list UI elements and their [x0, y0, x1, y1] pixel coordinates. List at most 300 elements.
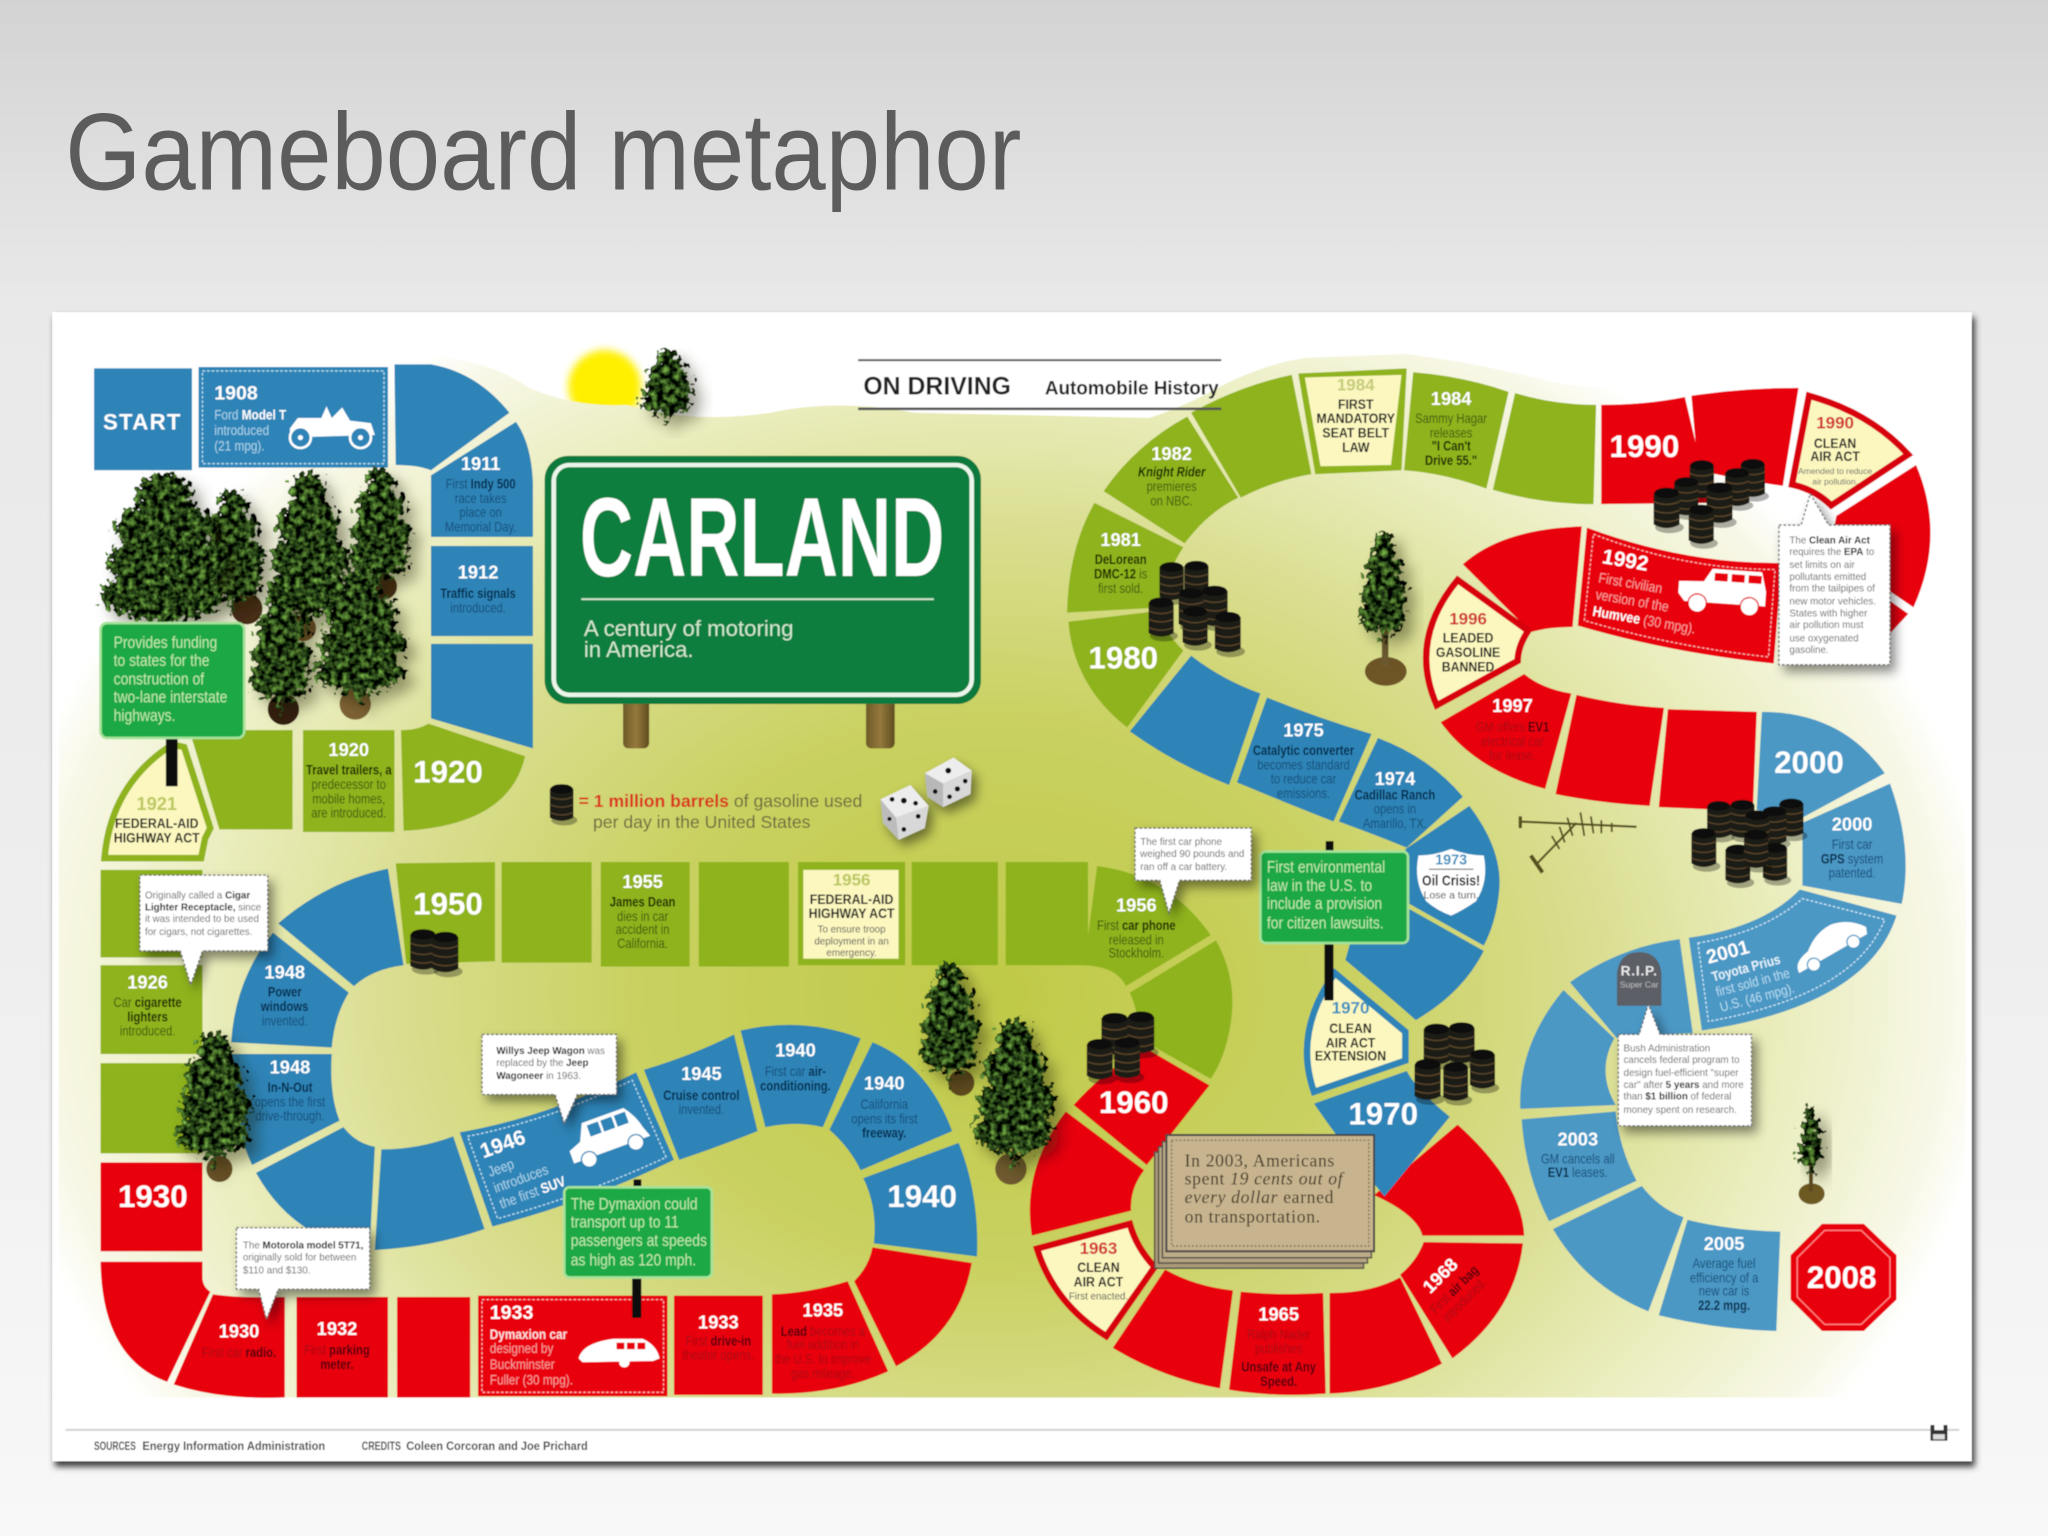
card: transportation fact: every dollar earned	[1185, 1187, 1334, 1207]
tile: 2005	[1659, 1220, 1780, 1331]
tile: 1968	[1400, 1242, 1523, 1358]
callout: Bush Administration: design fuel-efficient "super	[1624, 1068, 1739, 1079]
callout: Motorola: originally sold for between	[243, 1252, 356, 1263]
callout: cigar lighter: it was intended to be used	[145, 914, 259, 925]
tile: 1945: 1945	[681, 1063, 722, 1084]
tile: red blank top	[1691, 388, 1799, 486]
tile: 1948 In-N-Out	[230, 1054, 340, 1165]
callout: car phone: weighed 90 pounds and	[1139, 849, 1244, 860]
tile: 1955: James Dean	[610, 894, 675, 910]
tile: 2005: efficiency of a	[1690, 1271, 1758, 1286]
tile: 1935: gas mileage.	[791, 1366, 855, 1381]
tile: 1973 oil crisis: 1973	[1435, 853, 1467, 869]
icon: Prius	[1786, 910, 1873, 979]
tile: 1984 Sammy Hagar: "I Can't	[1432, 439, 1472, 454]
tile: 1960 large	[1074, 1049, 1209, 1165]
tile: 1940 air conditioning	[741, 1025, 861, 1127]
tile: 1956 Federal-Aid Highway Act: deployment in an	[814, 936, 889, 947]
tile: 1930 radio	[174, 1294, 285, 1398]
callout: Clean Air Act: set limits on air	[1789, 560, 1855, 571]
tile: 1990 Clean Air Act: Amended to reduce	[1798, 466, 1872, 476]
tile: 2001 Prius: Toyota Prius	[1710, 951, 1782, 985]
tile: 1921 Federal-Aid Highway Act	[104, 744, 210, 858]
tile: 2003: EV1 leases.	[1548, 1165, 1608, 1180]
tile: red big bend	[1463, 526, 1582, 632]
tile: 1992 Humvee	[1578, 528, 1782, 664]
tile: 1912: Traffic signals	[440, 586, 516, 601]
tile: 1940 California freeway: freeway.	[862, 1126, 906, 1141]
barrels: 2000	[1691, 799, 1808, 888]
green sign: federal funding: construction of	[114, 670, 205, 689]
barrels: 1960	[1087, 1012, 1159, 1084]
tile: 2005: Average fuel	[1693, 1256, 1756, 1272]
tile: red blank lower 1	[1556, 695, 1664, 806]
footer credits: Energy Information Administration	[142, 1440, 325, 1453]
tile: 1940 large	[863, 1143, 977, 1256]
tile: 2000 GPS: First car	[1832, 837, 1872, 852]
tile: 1932: 1932	[317, 1318, 357, 1339]
tile: 1946 Jeep SUV	[460, 1072, 674, 1226]
tile: blue top arc	[278, 869, 404, 986]
tile: 1975: becomes standard	[1257, 757, 1350, 773]
green sign: Dymaxion: The Dymaxion could	[571, 1195, 698, 1214]
tile: 1920 large: 1920	[413, 754, 483, 789]
callout: Clean Air Act	[1779, 494, 1890, 665]
icon: tombstone	[1617, 952, 1661, 1006]
tile: 1956 Federal-Aid Highway Act: emergency.	[826, 948, 877, 959]
tile: 1963 Clean Air Act	[1037, 1224, 1155, 1336]
tile: 1981	[1067, 503, 1183, 613]
tile: 1948 In-N-Out: In-N-Out	[268, 1080, 313, 1095]
tile: 1935: Lead becomes a	[781, 1324, 865, 1339]
barrels: 1950	[410, 929, 463, 977]
tile: 1965: Unsafe at Any	[1241, 1359, 1316, 1375]
tile: 1933 drive-in: First drive-in	[686, 1333, 751, 1349]
tile: start: START	[103, 410, 182, 435]
tile: 1992 Humvee: Humvee (30 mpg).	[1591, 603, 1697, 637]
tile: 1974	[1339, 738, 1463, 848]
tile: 1963 Clean Air Act: CLEAN	[1077, 1260, 1120, 1275]
tile: 1940 California freeway: California	[861, 1097, 908, 1112]
footer rule	[65, 1429, 1959, 1431]
card: transportation fact: In 2003, Americans	[1185, 1150, 1335, 1170]
tile: red right arc 2	[1829, 465, 1930, 607]
tile: 1984 seat belt law: LAW	[1342, 439, 1370, 455]
sign post right	[866, 699, 895, 748]
board landscape	[59, 354, 1966, 1398]
tile: blue blank lower	[1553, 1186, 1684, 1311]
tile: 1920 trailers	[303, 730, 394, 832]
tile: 1946 Jeep SUV: 1946	[477, 1126, 529, 1163]
tile: 1980 large: 1980	[1088, 641, 1158, 676]
tile: 1956 car phone: First car phone	[1097, 918, 1176, 933]
tile: 1975: 1975	[1283, 720, 1324, 741]
callout: cigar lighter	[140, 875, 268, 985]
barrels: 1970	[1415, 1022, 1499, 1106]
tile: 1920 trailers: 1920	[328, 739, 369, 760]
tile: 2000 GPS: GPS system	[1821, 851, 1883, 867]
icon: Dymaxion car	[579, 1339, 660, 1368]
callout: Bush Administration: money spent on research.	[1624, 1105, 1737, 1116]
card: transportation fact	[1155, 1135, 1374, 1268]
tile: 1940 air conditioning: conditioning.	[760, 1079, 831, 1094]
tile: 1912: 1912	[458, 562, 498, 583]
tile: 1955: dies in car	[617, 909, 668, 924]
tile: red corner 2	[854, 1247, 972, 1366]
callout: Clean Air Act: requires the EPA to	[1789, 547, 1875, 558]
tile: 2003: GM cancels all	[1541, 1152, 1615, 1167]
green sign: federal funding: Provides funding	[114, 634, 217, 652]
pine tree	[1359, 533, 1407, 686]
footer credits	[94, 1440, 588, 1453]
tile: 1973 oil crisis: Oil Crisis!	[1422, 872, 1480, 889]
tile: 1990 Clean Air Act: CLEAN	[1814, 435, 1856, 451]
tile: red bottom 1	[1113, 1270, 1233, 1388]
slide title: Gameboard metaphor	[65, 91, 1021, 213]
legend: barrels	[550, 784, 862, 832]
tile: 1984 seat belt law: SEAT BELT	[1322, 425, 1389, 441]
green sign: environmental law	[1260, 841, 1408, 1000]
tile: 2000 GPS: 2000	[1832, 814, 1872, 835]
green sign: federal funding	[101, 623, 244, 786]
tree near 1930	[176, 1032, 252, 1182]
icon: dice	[880, 758, 972, 840]
tile: 1956 car phone: 1956	[1116, 895, 1157, 916]
tile: 2008 stop sign	[1791, 1224, 1896, 1331]
tile: 1997	[1441, 674, 1571, 789]
icon: save	[1930, 1425, 1947, 1441]
tile: 1981: 1981	[1100, 529, 1141, 550]
tile: 1997: electrical car	[1481, 734, 1544, 749]
green sign: Dymaxion: passengers at speeds	[571, 1232, 707, 1250]
green sign: federal funding: highways.	[114, 707, 176, 725]
tile: green blank row 3	[912, 862, 998, 965]
tile: 1956 Federal-Aid Highway Act: FEDERAL-AID	[810, 891, 893, 907]
tile: 1932: meter.	[320, 1357, 354, 1372]
tile: 1970 Clean Air Act Extension: CLEAN	[1329, 1021, 1372, 1036]
tile: 1956 car phone	[1084, 866, 1211, 986]
tile: 1992 Humvee: 1992	[1600, 545, 1650, 576]
tile: 1933 Dymaxion: Dymaxion car	[490, 1326, 567, 1342]
green sign: Dymaxion: as high as 120 mph.	[571, 1251, 696, 1270]
tile: 1996 leaded gasoline banned: BANNED	[1442, 659, 1494, 675]
callout: Clean Air Act: new motor vehicles.	[1789, 596, 1876, 608]
sign post left	[623, 699, 649, 748]
tile: 1970 Clean Air Act Extension	[1307, 973, 1405, 1092]
tile: 1968: First air bag	[1427, 1263, 1482, 1317]
tile: 1935	[772, 1281, 888, 1394]
tile: 1933 Dymaxion: 1933	[490, 1302, 533, 1324]
tile: blue blank 1	[375, 1136, 485, 1250]
tile: 1945: Cruise control	[663, 1088, 739, 1103]
tile: 1940 California freeway	[829, 1042, 952, 1170]
tile: red small	[1890, 601, 1908, 633]
tile: 1911: Memorial Day.	[445, 520, 516, 535]
tile: 1956 Federal-Aid Highway Act: 1956	[833, 871, 870, 890]
tile: 1963 Clean Air Act: AIR ACT	[1074, 1274, 1123, 1290]
tile: 2003: 2003	[1557, 1128, 1598, 1149]
tile: 1968: 1968	[1418, 1254, 1462, 1297]
callout: Clean Air Act: air pollution must	[1789, 620, 1864, 631]
tile: 1948 In-N-Out: 1948	[270, 1057, 310, 1078]
tile: 1932: First parking	[304, 1342, 370, 1358]
icon: highway shield	[1417, 849, 1485, 916]
tile: 1940 California freeway: opens its first	[851, 1111, 918, 1127]
green sign: Dymaxion: transport up to 11	[571, 1214, 679, 1232]
tile: 1930 large	[101, 1162, 202, 1251]
tile: 1946 Jeep SUV: introduces	[491, 1161, 551, 1196]
tile: 1975: Catalytic converter	[1253, 743, 1354, 758]
tile: 1908: introduced	[214, 422, 269, 438]
tile: 1932	[296, 1297, 388, 1398]
tile: 1975: emissions.	[1277, 786, 1330, 801]
tile: 1956 car phone: released in	[1109, 932, 1164, 948]
tile: 1920 trailers: are introduced.	[311, 806, 386, 821]
legend: barrels: per day in the United States	[593, 812, 811, 832]
tile: 2000 large	[1757, 712, 1885, 819]
icon: Humvee	[1677, 567, 1767, 617]
icon: Model T car	[290, 406, 375, 448]
tile: 1990 large: 1990	[1610, 429, 1679, 464]
tile: 1992 Humvee: version of the	[1594, 586, 1670, 615]
tile: 1908	[199, 367, 388, 468]
callout: Clean Air Act: from the tailpipes of	[1789, 583, 1875, 595]
tile: 1996 leaded gasoline banned: GASOLINE	[1436, 644, 1501, 660]
tile: 2000 GPS: patented.	[1829, 866, 1876, 881]
tile: red corner	[101, 1262, 210, 1382]
tile: red bottom 2	[1330, 1277, 1442, 1394]
tile: 1948 In-N-Out: opens the first	[255, 1094, 326, 1110]
tile: 1965	[1229, 1292, 1326, 1395]
tile: 1956 Federal-Aid Highway Act: HIGHWAY ACT	[809, 906, 895, 921]
green sign: environmental law: law in the U.S. to	[1267, 877, 1372, 895]
tile: 1984 Sammy Hagar	[1404, 372, 1509, 488]
sun	[568, 350, 641, 423]
heading: ON DRIVING: ON DRIVING	[863, 373, 1012, 400]
tile: 1984 Sammy Hagar: 1984	[1431, 388, 1472, 409]
tile: 1926: Car cigarette	[114, 995, 182, 1010]
tile: 1948 In-N-Out: drive-through.	[255, 1109, 325, 1124]
tile: 1956 Federal-Aid Highway Act: To ensure troop	[818, 925, 886, 936]
tile: 1975: to reduce car	[1271, 772, 1336, 787]
tile: 1948 power windows: Power	[268, 985, 302, 1000]
tile: 1965: publishes	[1255, 1341, 1302, 1356]
tile: 1921 Federal-Aid Highway Act: 1921	[136, 793, 177, 814]
green sign: federal funding: two-lane interstate	[114, 688, 227, 707]
tile: 1920 large	[401, 724, 525, 831]
tile: 1926	[101, 965, 202, 1054]
tile: 1990 Clean Air Act	[1792, 396, 1908, 505]
tile: 1982: on NBC.	[1150, 493, 1193, 509]
tile: 1911: race takes	[455, 491, 507, 506]
tile: 1981: DeLorean	[1095, 552, 1147, 568]
tile: 1940 California freeway: 1940	[864, 1072, 905, 1093]
tile: blue blank diagonal	[1130, 656, 1260, 785]
tile: 1982: 1982	[1151, 443, 1192, 464]
tile: 1935: 1935	[803, 1300, 843, 1321]
tile: 1970 large: 1970	[1348, 1097, 1418, 1132]
tile: 1920 trailers: Travel trailers, a	[306, 763, 393, 778]
callout: Bush Administration: car" after 5 years and more	[1624, 1080, 1744, 1091]
barrels: 1980	[1149, 561, 1245, 657]
callout: Clean Air Act: gasoline.	[1789, 645, 1829, 656]
tile: 1930 radio: First car radio.	[202, 1345, 276, 1360]
tile: 1981: DMC-12 is	[1094, 567, 1147, 582]
tile: 1955: accident in	[616, 922, 669, 937]
callout: Bush Administration: Bush Administration	[1624, 1043, 1710, 1055]
tile: 1920 trailers: predecessor to	[312, 777, 386, 792]
tile: 1984 seat belt law: FIRST	[1338, 396, 1374, 412]
card: transportation fact: on transportation.	[1185, 1207, 1321, 1227]
tile: 1933 Dymaxion: Buckminster	[490, 1356, 555, 1372]
tile: 1940 large: 1940	[887, 1179, 957, 1214]
callout: Clean Air Act: The Clean Air Act	[1789, 535, 1870, 546]
tile: 1933 drive-in	[674, 1296, 763, 1395]
tree by the sun	[641, 350, 694, 421]
callout: Motorola: The Motorola model 5T71,	[243, 1240, 364, 1252]
tile: blue blank	[431, 644, 533, 748]
forest: left trees	[101, 468, 411, 725]
CARLAND road sign: in America.	[584, 637, 694, 662]
tile: 1935: fuel addition in	[787, 1337, 859, 1353]
tile: 1982: Knight Rider	[1138, 465, 1206, 480]
tile: green blank left	[101, 870, 202, 957]
icon: SUV	[562, 1103, 653, 1172]
tile: 1970 Clean Air Act Extension: 1970	[1332, 999, 1369, 1018]
tile: 1984 seat belt law: MANDATORY	[1317, 411, 1395, 426]
tile: 1992 Humvee: First civilian	[1597, 570, 1664, 597]
tile: 1908: (21 mpg).	[214, 438, 265, 454]
tile: red right arc	[1374, 1125, 1524, 1236]
trees centre	[919, 963, 1055, 1185]
tile: 2001 Prius: 2001	[1704, 936, 1752, 969]
tile: blue above 1970	[1345, 909, 1484, 1020]
tile: 1997: for lease.	[1489, 748, 1536, 763]
tile: 1984 Sammy Hagar: releases	[1430, 426, 1472, 441]
tile: 1965: Speed.	[1260, 1374, 1297, 1389]
tile: 1911: place on	[459, 505, 502, 521]
tile: 1996 leaded gasoline banned: LEADED	[1443, 630, 1493, 646]
tile: 1973 oil crisis: Lose a turn.	[1424, 891, 1479, 902]
tile: 1970 large	[1314, 1071, 1450, 1196]
tile: 1948 power windows: windows	[260, 999, 308, 1014]
tile: 1908: Ford Model T	[214, 406, 286, 422]
green sign: environmental law: First environmental	[1267, 858, 1385, 877]
tile: red left arc	[1030, 1112, 1144, 1236]
tile: 1960 large: 1960	[1099, 1085, 1169, 1120]
tile: 1997: 1997	[1492, 695, 1533, 716]
tile: 1984 seat belt law: 1984	[1337, 376, 1375, 395]
callout: Bush Administration	[1618, 1004, 1752, 1126]
footer credits: Coleen Corcoran and Joe Prichard	[406, 1440, 588, 1453]
tile: blue blank left arc	[1520, 990, 1616, 1109]
tile: 1911: 1911	[461, 453, 500, 474]
heading: ON DRIVING	[858, 359, 1221, 410]
tile: 1963 Clean Air Act: 1963	[1080, 1239, 1117, 1258]
tile: 1990 Clean Air Act: AIR ACT	[1810, 448, 1860, 464]
tile: 1933 drive-in: 1933	[698, 1311, 739, 1332]
small pine	[1797, 1105, 1825, 1204]
tile: corner	[394, 364, 509, 470]
tile: 1970 Clean Air Act Extension: EXTENSION	[1315, 1048, 1386, 1064]
legend: barrels: = 1 million barrels of gasoline used	[579, 791, 862, 811]
tile: 1965: Ralph Nader	[1247, 1327, 1310, 1342]
tile: 1956 car phone: Stockholm.	[1109, 945, 1164, 961]
callout: car phone: The first car phone	[1140, 837, 1222, 848]
tile: green blank top	[1191, 375, 1311, 498]
tile: 1970 Clean Air Act Extension: AIR ACT	[1326, 1035, 1375, 1051]
green sign: environmental law: for citizen lawsuits.	[1267, 914, 1384, 933]
callout: cigar lighter: Originally called a Cigar	[145, 890, 250, 902]
tile: 1945	[644, 1034, 758, 1160]
tile: 2000 GPS	[1802, 784, 1906, 904]
tile: 1950 large	[396, 862, 495, 964]
tile: 2000 large: 2000	[1774, 745, 1844, 780]
callout: Clean Air Act: use oxygenated	[1789, 633, 1859, 644]
tile: blue corner	[256, 1127, 375, 1250]
tile: 1950 large: 1950	[413, 886, 483, 921]
tile: 1940 air conditioning: First car air-	[765, 1064, 826, 1080]
tile: 1930 large: 1930	[118, 1179, 188, 1214]
callout: Bush Administration: cancels federal program to	[1624, 1055, 1740, 1066]
tile: 1926: lighters	[127, 1009, 168, 1025]
tile: green blank lower	[101, 1063, 202, 1153]
tile: 1968: introduced.	[1439, 1275, 1490, 1325]
tile: 1984 Sammy Hagar: Drive 55."	[1425, 453, 1477, 468]
tile: 1933 Dymaxion	[478, 1296, 667, 1396]
tile: 1996 leaded gasoline banned: 1996	[1449, 609, 1487, 628]
tile: 1908: 1908	[214, 383, 258, 405]
tile: 1974: Cadillac Ranch	[1355, 787, 1435, 803]
tile: 1930 radio: 1930	[219, 1320, 259, 1341]
callout: cigar lighter: for cigars, not cigarettes.	[145, 927, 252, 938]
tile: 1965: 1965	[1258, 1303, 1299, 1324]
tile: 1935: the U.S. to improve	[775, 1352, 871, 1367]
tile: 2008 stop sign: 2008	[1807, 1260, 1876, 1295]
tile: 1975	[1237, 697, 1371, 822]
tile: 1984 seat belt law	[1298, 368, 1407, 474]
CARLAND road sign: CARLAND	[580, 474, 944, 600]
tile: red blank	[397, 1297, 470, 1398]
tile: 2003	[1522, 1112, 1637, 1221]
tile: 1912: introduced.	[450, 601, 506, 616]
tile: 1956 Federal-Aid Highway Act	[798, 862, 905, 965]
tile: 1990 Clean Air Act: air pollution.	[1812, 477, 1858, 487]
tile: 1974: opens in	[1374, 802, 1416, 817]
tile: 1933 Dymaxion: designed by	[490, 1340, 554, 1356]
tile: 2005: 22.2 mpg.	[1698, 1298, 1750, 1313]
green sign: Dymaxion	[564, 1179, 712, 1318]
panel: infographic board	[52, 312, 1972, 1462]
barrels: 1990	[1654, 459, 1769, 549]
callout: Clean Air Act: pollutants emitted	[1789, 572, 1866, 583]
tile: green blank row 4	[1006, 862, 1088, 965]
tile: 1974: Amarillo, TX.	[1363, 816, 1427, 831]
CARLAND road sign	[545, 456, 981, 704]
callout: Motorola: $110 and $130.	[243, 1265, 310, 1277]
tile: green blank row 1	[502, 862, 592, 963]
tile: 1946 Jeep SUV: Jeep	[486, 1156, 516, 1180]
tile: 1955: 1955	[622, 871, 663, 892]
tile: green blank	[189, 730, 293, 829]
tile: 1933 Dymaxion: Fuller (30 mpg).	[490, 1372, 573, 1388]
callout: Clean Air Act: States with higher	[1789, 608, 1868, 620]
tile: 1980 large	[1068, 611, 1183, 728]
tile: 1982: premieres	[1147, 479, 1197, 494]
tile: red blank lower 2	[1659, 709, 1757, 811]
green sign: environmental law: include a provision	[1267, 895, 1382, 913]
footer credits: SOURCES	[94, 1440, 136, 1453]
